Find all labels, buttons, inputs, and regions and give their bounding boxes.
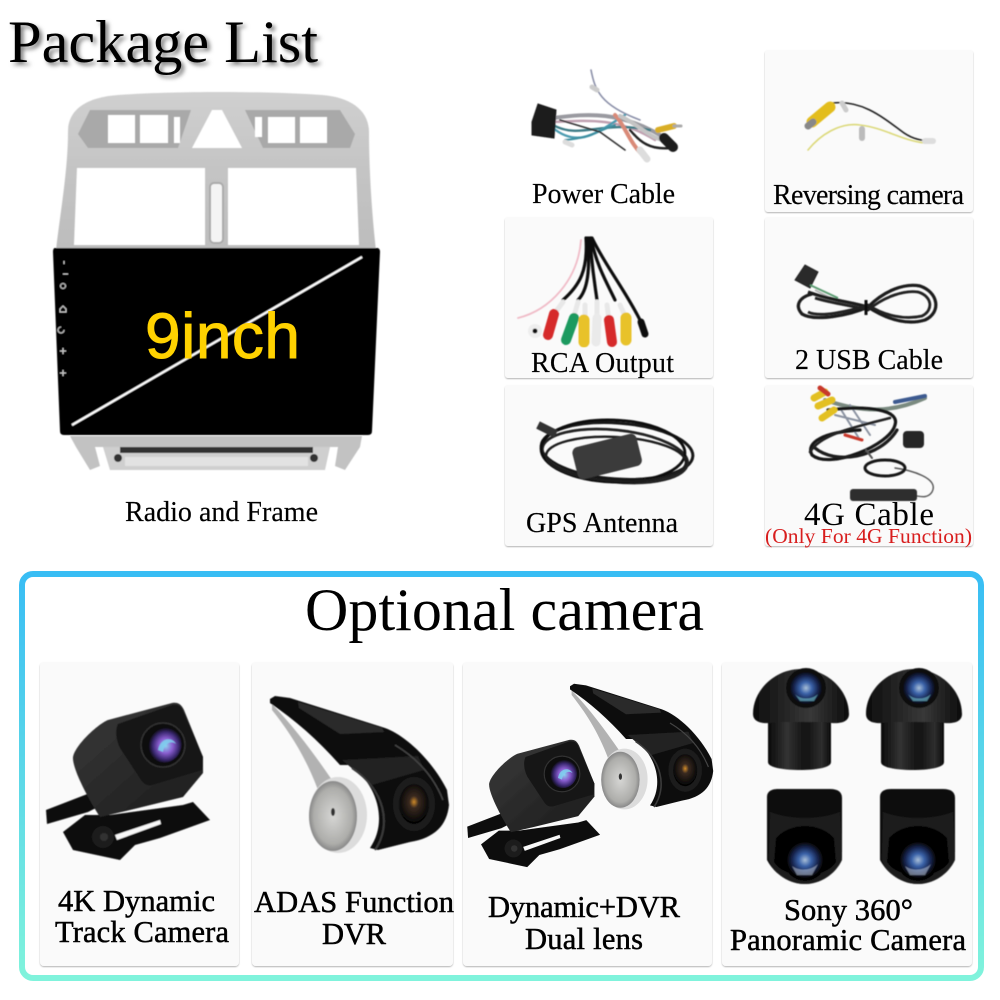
icon: dome camera right xyxy=(866,668,962,770)
screen xyxy=(53,248,380,435)
label: Reversing camera xyxy=(773,180,965,211)
card: 4K dynamic track camera xyxy=(40,662,239,966)
label: 2 USB Cable xyxy=(795,345,943,376)
icon: dome camera left xyxy=(753,668,849,770)
label: Sony 360° xyxy=(784,893,913,927)
label: RCA Output xyxy=(531,348,674,379)
icon: RCA cables xyxy=(518,238,645,342)
icon: DVR xyxy=(270,696,449,853)
panel: GPS antenna xyxy=(505,385,713,546)
panel: reversing camera xyxy=(765,50,973,212)
card: ADAS function DVR xyxy=(252,662,454,966)
label: GPS Antenna xyxy=(526,508,679,539)
panel: 2 USB cable xyxy=(765,217,973,378)
icon: DVR small xyxy=(570,684,713,809)
label line 2: DVR xyxy=(322,917,387,951)
radio caption: Radio and Frame xyxy=(125,497,318,528)
icon: rear camera xyxy=(46,703,210,860)
icon: 4G cable xyxy=(810,388,933,501)
panel: power cable xyxy=(532,70,681,210)
icon: power cable xyxy=(532,70,681,159)
side buttons xyxy=(58,261,68,376)
diagonal line xyxy=(72,257,362,425)
lower bracket xyxy=(70,436,362,470)
icon: box camera left xyxy=(767,789,842,884)
radio and frame illustration xyxy=(53,92,380,470)
screen size label: 9inch xyxy=(145,300,300,372)
icon: reversing cable xyxy=(808,103,933,150)
panel: optional camera xyxy=(22,574,981,978)
label: 4K Dynamic xyxy=(58,884,215,918)
title: Package List xyxy=(8,9,318,76)
label: Dynamic+DVR xyxy=(488,890,681,924)
icon: GPS antenna xyxy=(538,418,695,489)
label: 4G Cable xyxy=(804,497,934,533)
label: ADAS Function xyxy=(254,885,454,919)
card: Sony 360 panoramic camera xyxy=(722,662,972,966)
label line 2: Panoramic Camera xyxy=(730,923,966,957)
icon: rear camera small xyxy=(467,740,600,867)
panel: 4G cable xyxy=(765,385,973,548)
label: Power Cable xyxy=(532,179,675,210)
note: (Only For 4G Function) xyxy=(765,524,972,548)
label line 2: Dual lens xyxy=(525,922,643,956)
icon: box camera right xyxy=(880,789,955,884)
heading: Optional camera xyxy=(305,577,704,643)
card: dynamic plus DVR dual lens xyxy=(463,662,713,966)
panel: RCA output xyxy=(505,217,713,379)
icon: USB cable xyxy=(795,265,936,322)
label line 2: Track Camera xyxy=(55,915,229,949)
mounting frame xyxy=(56,92,376,250)
